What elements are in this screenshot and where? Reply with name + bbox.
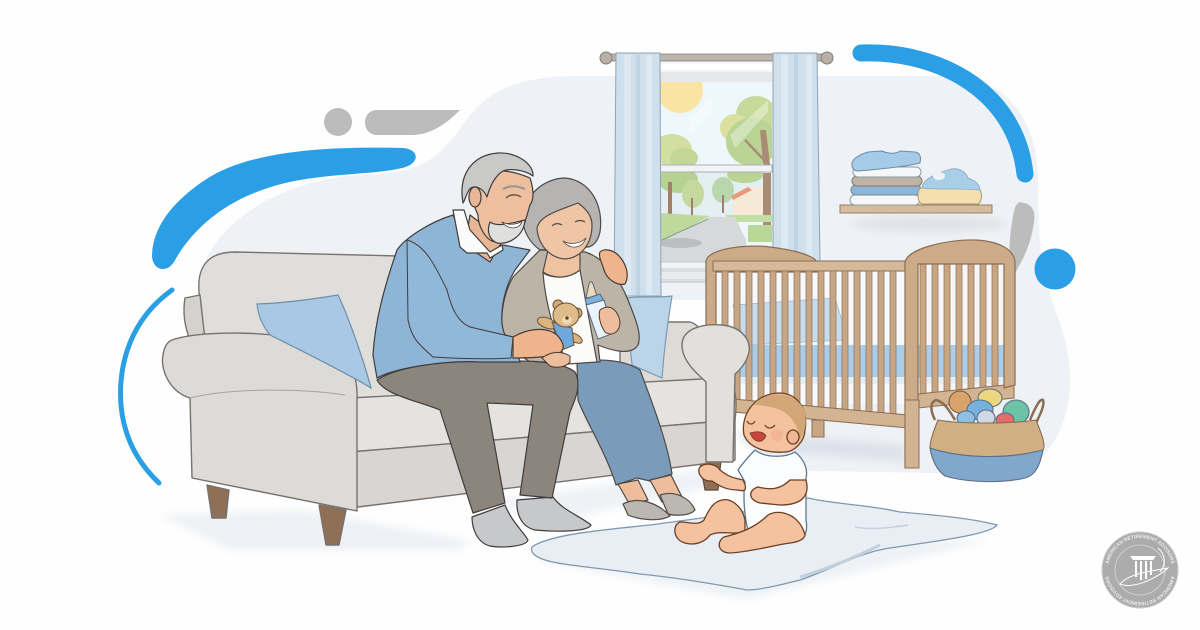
floor shadow under crib bbox=[735, 432, 905, 462]
sofa bbox=[162, 252, 749, 545]
sofa back left bbox=[199, 252, 400, 420]
crib left headboard bbox=[706, 246, 817, 400]
sofa foot right bbox=[700, 460, 721, 490]
sofa back right bbox=[620, 322, 705, 420]
baby eyes bbox=[747, 421, 775, 428]
grass and road bbox=[660, 213, 710, 242]
grandmother hair back bbox=[523, 178, 601, 250]
baby mouth bbox=[750, 432, 766, 441]
baby bottle bbox=[585, 282, 614, 339]
grandfather socks bbox=[472, 505, 528, 547]
grandmother legs bbox=[577, 360, 672, 485]
grandfather collar bbox=[453, 210, 503, 258]
grandfather sleeve bbox=[407, 240, 513, 359]
company seal logo bbox=[1102, 532, 1178, 608]
baby head bbox=[743, 393, 806, 452]
grandfather bbox=[373, 153, 591, 547]
house bbox=[733, 186, 763, 216]
grandfather sweater bbox=[373, 215, 530, 378]
grandfather hand on shoulder bbox=[599, 250, 627, 284]
teddy in basket bbox=[949, 391, 971, 413]
crib top rail bbox=[713, 261, 906, 271]
grandmother smile bbox=[563, 238, 586, 247]
decoration: thin blue arc left bbox=[121, 290, 172, 483]
baby right leg bbox=[719, 512, 805, 553]
sofa seat cushion bbox=[350, 378, 736, 452]
decoration: blue circle right bbox=[1034, 248, 1076, 290]
decoration: blue arc top right bbox=[861, 53, 1025, 174]
play blanket bbox=[532, 498, 997, 600]
grandfather smile bbox=[502, 221, 522, 228]
sofa base bbox=[350, 420, 735, 508]
teddy bear bbox=[536, 300, 584, 350]
cushion right bbox=[625, 296, 672, 378]
grandfather neck bbox=[465, 215, 503, 262]
grandmother ankles and shoes bbox=[618, 480, 648, 505]
cushion left bbox=[257, 295, 371, 388]
toy balls bbox=[978, 389, 1002, 407]
grandfather trousers bbox=[377, 361, 578, 513]
grandmother hand under teddy bbox=[542, 352, 570, 367]
sofa shadow on floor bbox=[160, 510, 470, 550]
illustration: grandparents and baby in nursery bbox=[118, 44, 1178, 608]
baby bbox=[675, 393, 807, 553]
toy basket bbox=[930, 389, 1044, 482]
grandfather eyes and brow bbox=[506, 195, 521, 198]
crib pillow bbox=[733, 298, 848, 345]
decoration: grey crescent right bbox=[1009, 202, 1034, 278]
grandmother face bbox=[537, 203, 592, 259]
basket lower bbox=[930, 448, 1043, 482]
curtain rod bbox=[600, 52, 833, 64]
grandmother bbox=[502, 178, 695, 520]
sofa feet bbox=[207, 485, 229, 518]
baby hair bbox=[753, 395, 806, 440]
seal column emblem bbox=[1130, 556, 1156, 580]
crib near leg bbox=[812, 420, 824, 437]
grandfather head bbox=[470, 171, 533, 243]
grandmother neck bbox=[543, 250, 580, 277]
grandfather hand with teddy bbox=[513, 329, 563, 358]
baby ear bbox=[787, 430, 799, 444]
decoration: grey dot bbox=[324, 108, 352, 136]
decoration: grey pill bbox=[365, 110, 460, 135]
baby right arm bbox=[751, 480, 807, 505]
company seal logo: AMERICAN RETIREMENT ADVISORS bbox=[1105, 576, 1174, 606]
background blob bbox=[205, 76, 1070, 474]
decoration: large blue arc left bbox=[152, 148, 416, 269]
crib bbox=[706, 240, 1015, 468]
grandfather hair bbox=[462, 153, 533, 203]
sofa left arm bbox=[162, 333, 357, 511]
curtain right bbox=[773, 53, 820, 262]
tree upper right bbox=[736, 96, 772, 126]
crib right headboard bbox=[905, 240, 1015, 467]
grandmother shirt bbox=[543, 270, 597, 364]
baby bodysuit bbox=[738, 450, 807, 540]
sofa right arm bbox=[682, 325, 749, 462]
crib bottom rail bbox=[733, 399, 908, 428]
crib slats bbox=[722, 264, 998, 417]
grandfather ear bbox=[469, 187, 481, 207]
wall shelf with folded clothes bbox=[840, 151, 1008, 232]
grandmother hand with bottle bbox=[599, 307, 620, 334]
grandmother eyes bbox=[552, 220, 585, 226]
tree upper left bbox=[660, 134, 692, 164]
basket upper bbox=[930, 420, 1044, 457]
baby left arm bbox=[699, 464, 745, 491]
baby cheek bbox=[771, 429, 783, 441]
window bbox=[660, 62, 772, 282]
baby left leg bbox=[675, 500, 745, 544]
curtain left bbox=[614, 53, 661, 296]
grandmother cardigan bbox=[502, 250, 639, 362]
grandfather beard bbox=[488, 220, 525, 243]
seal text: AMERICAN RETIREMENT ADVISORS bbox=[1106, 534, 1175, 564]
crib mattress bbox=[722, 345, 1004, 377]
